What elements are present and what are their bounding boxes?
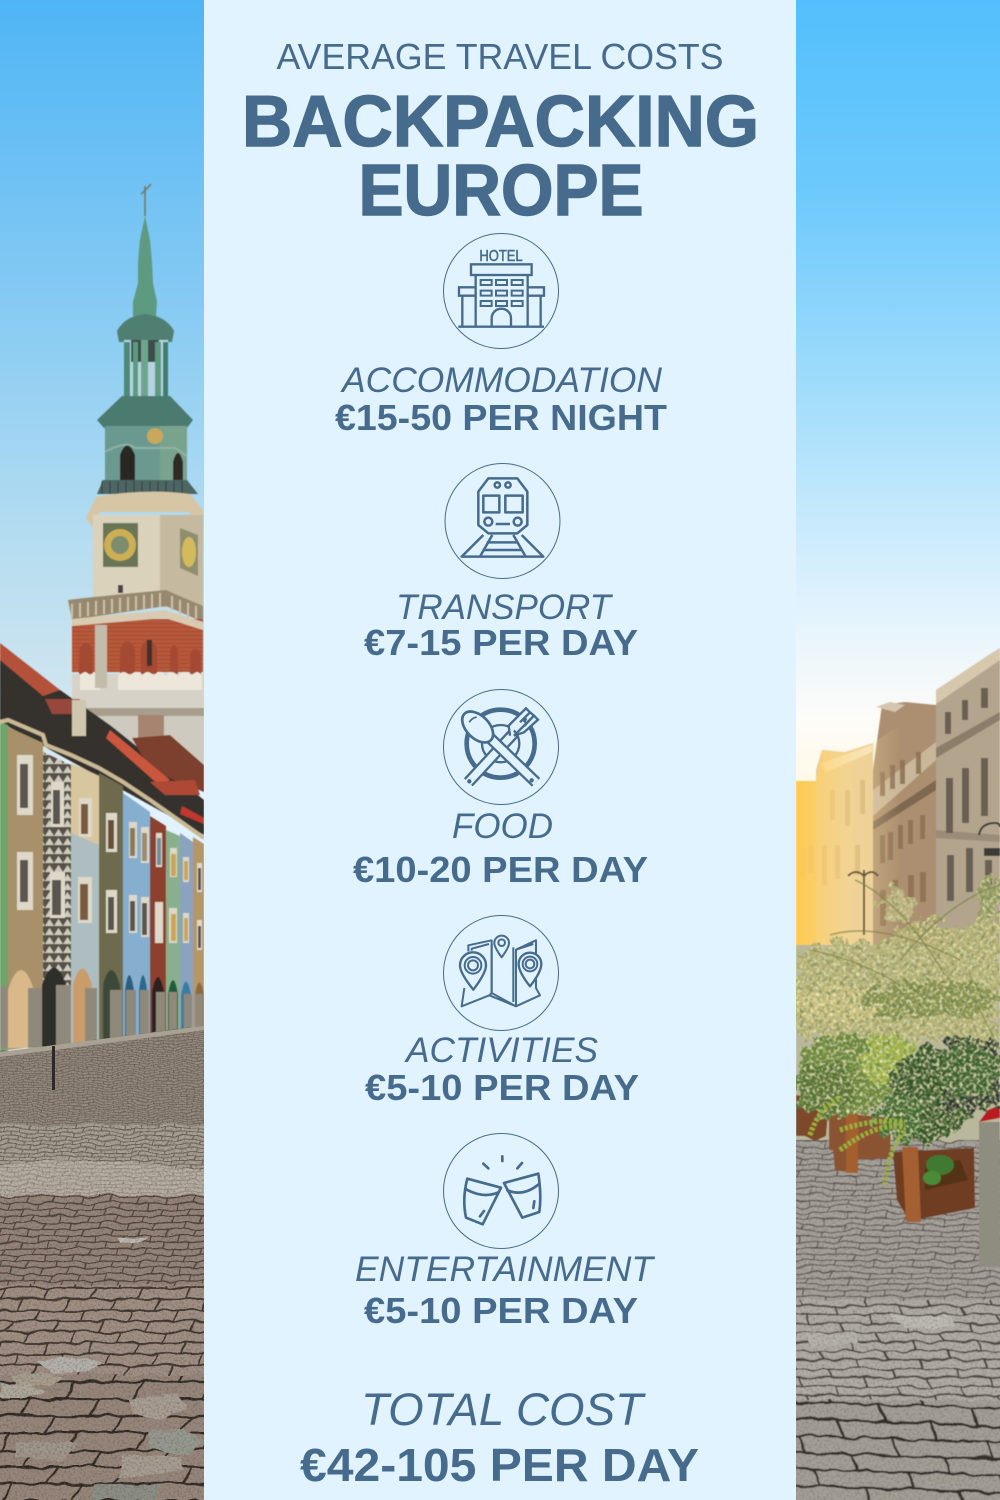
paving <box>796 1139 1000 1500</box>
central panel <box>204 0 796 1500</box>
windows <box>17 755 202 950</box>
value: activities cost: €5-10 PER DAY <box>365 1067 639 1108</box>
value: food cost: €10-20 PER DAY <box>353 849 648 890</box>
label: total cost: TOTAL COST <box>361 1384 647 1435</box>
icon: hotel <box>444 234 558 348</box>
wooden planters <box>796 1095 975 1222</box>
subtitle: AVERAGE TRAVEL COSTS <box>276 36 724 77</box>
section: transport <box>364 464 638 663</box>
label: accommodation: ACCOMMODATION <box>340 361 663 400</box>
main title: BACKPACKING <box>242 82 759 162</box>
row of painted houses <box>0 720 204 1053</box>
value: accommodation cost: €15-50 PER NIGHT <box>335 397 667 438</box>
icon: train <box>445 464 560 578</box>
label: transport: TRANSPORT <box>396 588 614 627</box>
section: activities <box>365 916 639 1108</box>
icon: hotel: HOTEL <box>479 248 523 265</box>
foliage <box>790 869 1000 1143</box>
photo: old town hall tower and colourful houses (left) <box>0 0 204 1500</box>
cobbled square <box>0 1027 204 1500</box>
branches and ferns <box>810 880 1000 1185</box>
arcade <box>0 968 204 1048</box>
town hall tower <box>68 184 204 790</box>
label: entertainment: ENTERTAINMENT <box>355 1250 656 1289</box>
section: accommodation <box>335 234 667 438</box>
main title: EUROPE <box>358 151 644 231</box>
icon: map with pins <box>444 916 558 1030</box>
main title <box>242 82 759 231</box>
icon: clinking glasses <box>444 1134 558 1248</box>
street background and haze <box>796 945 1000 1155</box>
icon: plate with spoon and fork <box>444 690 558 804</box>
section: total cost <box>300 1384 699 1491</box>
bollard <box>52 1046 55 1090</box>
value: entertainment cost: €5-10 PER DAY <box>364 1290 638 1331</box>
value: total cost per day: €42-105 PER DAY <box>300 1439 699 1491</box>
concrete planter wall <box>979 1105 1000 1267</box>
roofs of the houses <box>0 643 204 835</box>
value: transport cost: €7-15 PER DAY <box>364 622 638 663</box>
section: entertainment <box>355 1134 656 1331</box>
sunlit buildings <box>796 648 1000 946</box>
photo: sunlit Poznan street with planters (right) <box>796 0 1000 1500</box>
label: food: FOOD <box>452 807 553 846</box>
section: food <box>353 690 648 890</box>
label: activities: ACTIVITIES <box>404 1031 598 1070</box>
